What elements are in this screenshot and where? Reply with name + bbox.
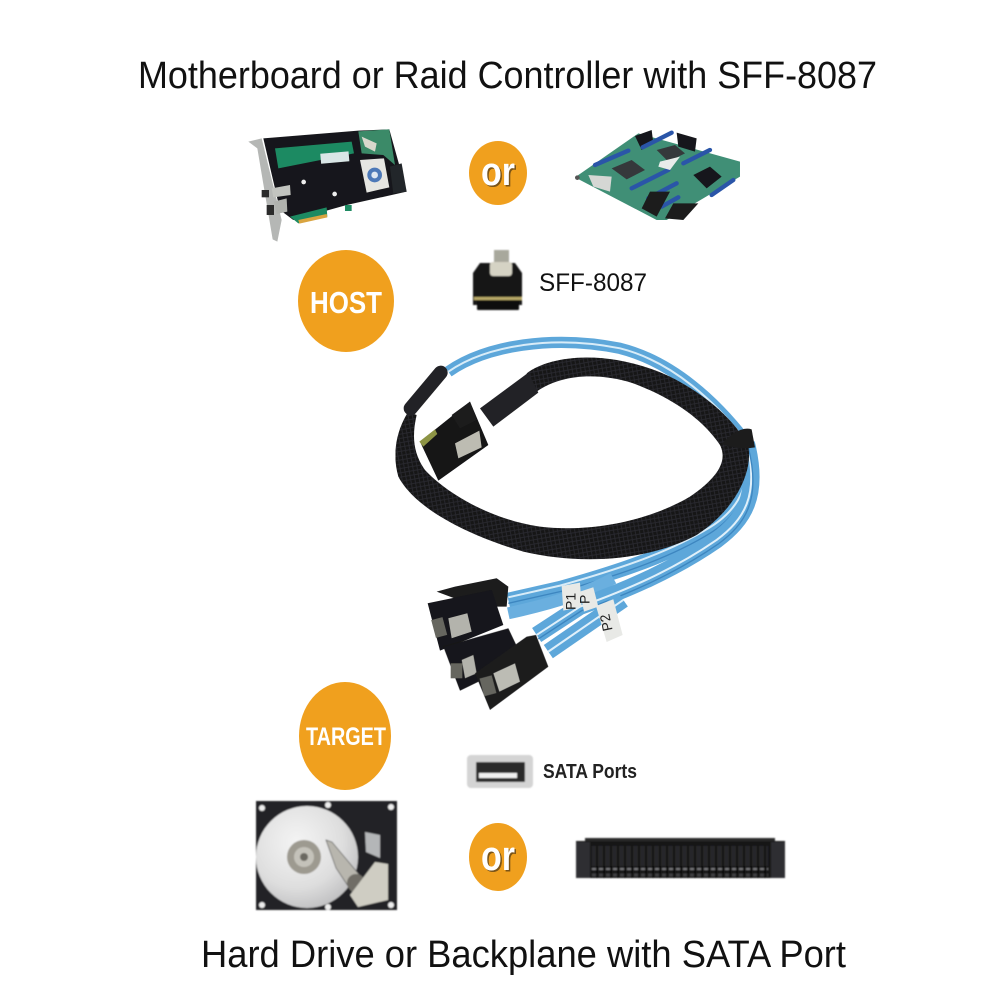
connector: SATA plug P2 (443, 628, 523, 691)
label: P2 sleeve (596, 599, 623, 642)
connector: SATA plug P1 (428, 578, 508, 651)
image: hard drive (256, 801, 397, 910)
badge: TARGET (299, 682, 391, 790)
label: P2 sleeve: P2 (596, 612, 616, 633)
cable: blue wires (448, 342, 753, 652)
badge text: TARGET: TARGET (306, 723, 386, 751)
image: SFF-8087 to 4 SATA cable (395, 342, 755, 710)
badge: or (bottom) (469, 823, 527, 891)
label: P sleeve: P (576, 595, 592, 604)
badge text: or: or (481, 832, 515, 879)
badge text: or: or (482, 152, 516, 196)
cable: black braided sleeve (395, 357, 749, 559)
label: P1 sleeve (562, 583, 582, 611)
image: backplane server (576, 838, 785, 878)
label: SATA Ports: SATA Ports (543, 761, 637, 783)
image: server motherboard (575, 130, 740, 220)
badge text: or: or (482, 834, 516, 880)
cable: velcro tie (722, 429, 755, 448)
badge: or (top) (469, 141, 527, 205)
label: P1 sleeve: P1 (562, 593, 578, 610)
footer heading: Hard Drive or Backplane with SATA Port (201, 934, 846, 976)
title: top heading: Motherboard or Raid Controller with SFF-8087 (138, 55, 877, 97)
label: P sleeve (576, 587, 598, 612)
connector: mini-SAS head (420, 402, 488, 481)
cable: mini-SAS boot (480, 373, 538, 427)
badge text: or: or (481, 150, 515, 194)
icon: SATA port (467, 755, 533, 788)
badge text: HOST: HOST (310, 285, 382, 320)
connector: SATA plug P3 (475, 635, 548, 710)
label: SFF-8087: SFF-8087 (539, 269, 647, 297)
badge: HOST (298, 250, 394, 352)
image: RAID controller card (248, 129, 407, 242)
icon: SFF-8087 connector (473, 250, 522, 310)
cable: heat-shrink splitter (411, 373, 441, 408)
